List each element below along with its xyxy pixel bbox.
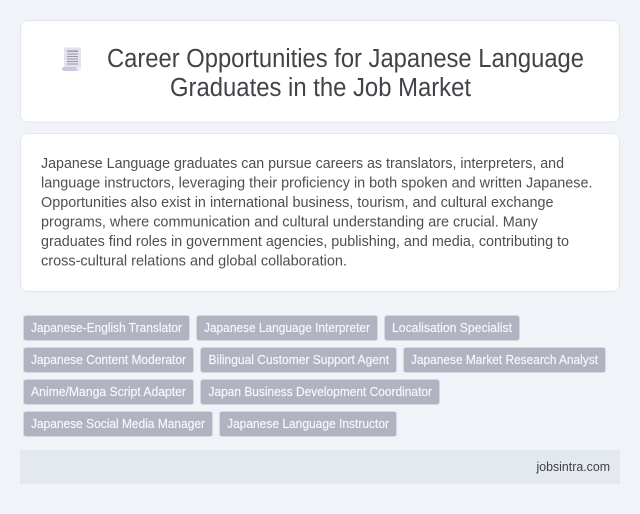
text block: career summary [41,155,592,270]
title: Career Opportunities for Japanese Language [107,45,584,73]
tag: Japanese Market Research Analyst [404,348,606,372]
tag: Japanese Social Media Manager [24,412,212,436]
text block: career summary: programs, where communication and cultural understanding are crucial. Many [41,214,538,230]
panel: description [20,134,620,292]
job tags [24,316,606,436]
text block: career summary: language instructors, leveraging their proficiency in both spoken and written Japanese. [41,174,592,192]
tag: Japanese Language Instructor: Japanese Language Instructor [227,416,390,431]
tag: Bilingual Customer Support Agent: Bilingual Customer Support Agent [208,352,389,367]
tag: Localisation Specialist: Localisation Specialist [392,320,512,335]
text block: career summary: Japanese Language graduates can pursue careers as translators, interpreters, and [41,155,564,172]
tag: Anime/Manga Script Adapter: Anime/Manga Script Adapter [31,384,187,399]
tag: Bilingual Customer Support Agent [200,348,396,372]
tag: Anime/Manga Script Adapter [24,380,194,404]
icon: paper scroll document [62,48,81,71]
tag: Japan Business Development Coordinator: Japan Business Development Coordinator [208,384,433,399]
footer bar [20,450,620,484]
footer source text: jobsintra.com [536,459,610,474]
tag: Japan Business Development Coordinator [200,380,440,404]
text block: career summary: graduates find roles in government agencies, publishing, and media, contributing to [41,233,569,250]
title [107,45,584,102]
tag: Japanese Language Interpreter: Japanese Language Interpreter [204,320,371,335]
tag: Japanese Content Moderator: Japanese Content Moderator [31,352,187,367]
tag: Japanese Language Instructor [220,412,396,436]
text block: career summary: cross-cultural relations and global collaboration. [41,252,347,270]
tag: Japanese Social Media Manager: Japanese Social Media Manager [31,416,206,431]
tag: Japanese-English Translator [24,316,190,340]
tag: Japanese-English Translator: Japanese-English Translator [31,320,183,335]
tag: Japanese Language Interpreter [196,316,378,340]
tag: Localisation Specialist [384,316,520,340]
title: Graduates in the Job Market [170,74,471,102]
tag: Japanese Market Research Analyst: Japanese Market Research Analyst [411,352,598,367]
text block: career summary: Opportunities also exist in international business, tourism, and cultural exchange [41,194,554,211]
tag: Japanese Content Moderator [24,348,194,372]
panel: title header [20,20,620,122]
